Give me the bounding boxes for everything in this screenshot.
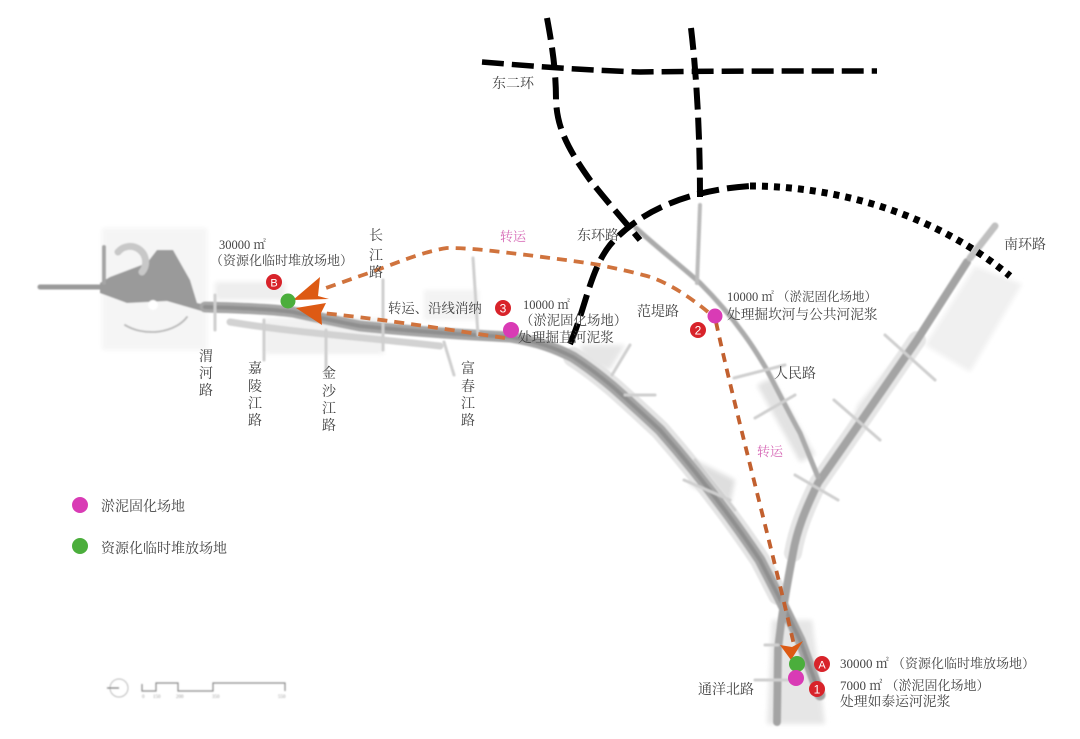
road label: 金沙江路: 江 — [322, 401, 336, 417]
road: east ring road — [570, 186, 750, 344]
callout: site 3: 处理掘苴河泥浆 — [518, 329, 614, 345]
side branches — [215, 258, 935, 680]
road label: 嘉陵江路: 嘉 — [248, 360, 262, 377]
legend swatch: resource site — [72, 538, 88, 554]
arrow: upper head to B — [293, 277, 329, 300]
road label: 渭河路: 渭 — [199, 349, 213, 365]
road label: 长江路: 长 — [369, 228, 383, 244]
callout: site 2: 处理掘坎河与公共河泥浆 — [727, 306, 878, 322]
river channel base map — [40, 205, 1022, 724]
road label: 渭河路: 路 — [199, 383, 213, 399]
road label: 富春江路: 富 — [461, 360, 475, 377]
west feeder — [40, 284, 105, 290]
road label: 长江路: 路 — [369, 265, 383, 281]
site marker: B green — [280, 294, 296, 308]
arrow: head to A — [780, 641, 803, 660]
callout: site 3: 10000 ㎡ — [523, 298, 570, 312]
route label: 转运 north: 转运 — [500, 229, 527, 244]
wide pale bank along the east river — [793, 340, 917, 553]
scale bar and north arrow: 150 — [153, 695, 161, 700]
road label: 通洋北路: 通洋北路 — [698, 682, 754, 698]
road label: 富春江路: 春 — [461, 379, 475, 395]
wide pale bank along the lower west river — [573, 357, 778, 595]
road label: 南环路: 南环路 — [1004, 236, 1046, 253]
road label: 东环路: 东环路 — [577, 228, 619, 244]
callout: site B: （资源化临时堆放场地） — [210, 253, 353, 268]
callout: site 3: （淤泥固化场地） — [520, 312, 627, 328]
west park water body — [100, 250, 217, 312]
badge A: A — [818, 660, 826, 672]
legend label: resource site: 资源化临时堆放场地 — [101, 540, 227, 557]
west river core — [205, 307, 820, 695]
north stub channel — [697, 205, 700, 283]
park details — [102, 247, 106, 287]
road label: 东二环: 东二环 — [492, 76, 535, 92]
badge 2 — [690, 322, 706, 338]
callout: site 2: 10000 ㎡ （淤泥固化场地） — [727, 289, 877, 304]
site marker: 1 magenta — [788, 670, 804, 686]
east river channel — [777, 262, 967, 722]
badge 3: 3 — [500, 302, 507, 316]
scale bar and north arrow: 550 — [278, 695, 286, 700]
road: south ring road — [750, 186, 1010, 276]
callout: site 1: 7000 ㎡ （淤泥固化场地） — [840, 678, 990, 693]
road label: 富春江路: 路 — [461, 413, 475, 429]
road label: 人民路: 人民路 — [774, 366, 816, 382]
site marker: 3 magenta — [503, 322, 519, 338]
middle river channel — [636, 228, 818, 477]
badge B — [266, 274, 282, 290]
road: north-west dashed road — [547, 18, 640, 240]
scale bar and north arrow: 200 — [176, 695, 184, 700]
east river upper stub — [970, 226, 995, 258]
road label: 金沙江路: 路 — [322, 418, 336, 434]
route: transfer north to B — [326, 248, 708, 312]
badge A — [814, 656, 830, 672]
callout: site 1: 处理如泰运河泥浆 — [840, 693, 951, 709]
west bank strip — [230, 322, 440, 346]
west river channel — [205, 307, 820, 695]
site marker: A green — [789, 656, 805, 672]
badge 2: 2 — [695, 324, 702, 338]
site marker: 2 magenta — [708, 308, 722, 324]
road: north dashed road — [691, 28, 700, 197]
scale bar and north arrow — [107, 679, 286, 700]
route: transfer south to A — [716, 322, 794, 645]
callout: site B: 30000 ㎡ — [219, 238, 266, 252]
road label: 嘉陵江路: 江 — [248, 396, 262, 412]
road label: 嘉陵江路: 路 — [248, 413, 262, 429]
route label: 转运、沿线消纳: 转运、沿线消纳 — [388, 300, 482, 316]
badge 1: 1 — [814, 682, 821, 696]
scale bar and north arrow: 350 — [212, 695, 220, 700]
badge B: B — [270, 278, 278, 290]
road label: 金沙江路: 金 — [322, 366, 336, 382]
road label: 渭河路: 河 — [199, 366, 213, 382]
road: east second ring — [482, 62, 877, 72]
legend swatch: sludge site — [72, 497, 88, 513]
road label: 金沙江路: 沙 — [322, 384, 337, 400]
faint surrounding land parcels — [102, 228, 1022, 724]
badge 3 — [495, 300, 511, 316]
legend — [72, 497, 227, 557]
road label: 范堤路: 范堤路 — [637, 303, 679, 320]
scale bar and north arrow: 0 — [142, 695, 145, 700]
route label: 转运 south: 转运 — [757, 444, 784, 459]
arrow: lower head to B — [296, 303, 326, 325]
callout: site A: 30000 ㎡ （资源化临时堆放场地） — [840, 656, 1035, 671]
badge 1 — [809, 681, 825, 697]
road label: 富春江路: 江 — [461, 396, 475, 412]
route: along the river to B — [322, 313, 505, 338]
legend label: sludge site: 淤泥固化场地 — [101, 498, 185, 515]
road label: 嘉陵江路: 陵 — [248, 378, 262, 395]
road label: 长江路: 江 — [369, 248, 383, 264]
